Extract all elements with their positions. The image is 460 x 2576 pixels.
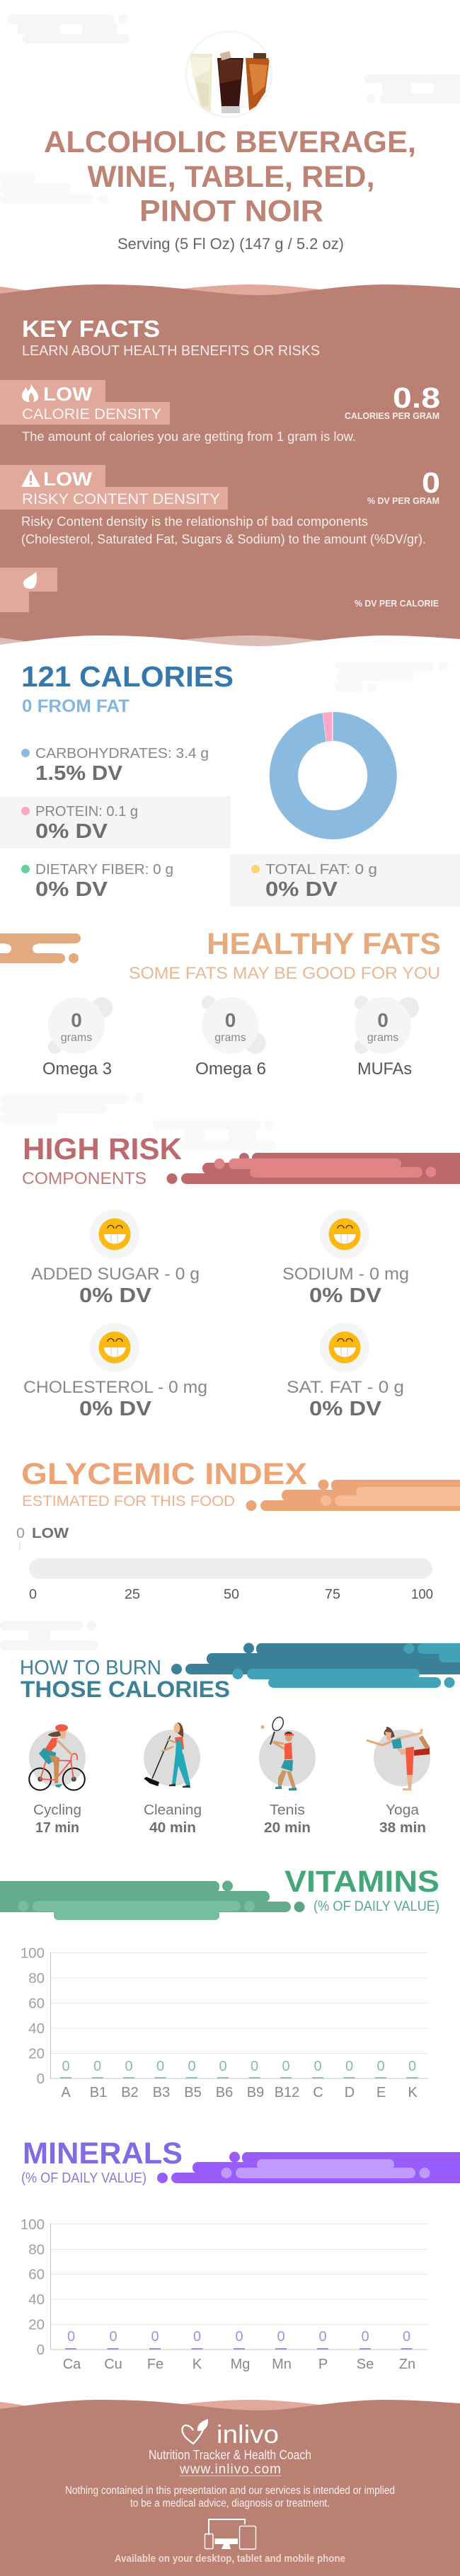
icon: smiley bbox=[328, 1219, 361, 1250]
omega 3: 0 bbox=[71, 1009, 82, 1031]
tagline: Nutrition Tracker & Health Coach bbox=[149, 2447, 311, 2462]
healthy fats heading: HEALTHY FATS bbox=[207, 927, 441, 961]
decorative band: minerals bbox=[157, 2151, 460, 2183]
mufas bbox=[355, 996, 419, 1079]
risky content description bbox=[21, 514, 426, 546]
minerals bar chart bbox=[21, 2216, 428, 2372]
risky content badge bbox=[0, 465, 228, 510]
icon: leaf bbox=[23, 572, 37, 589]
vitamins bar chart: 0 bbox=[125, 2059, 133, 2074]
title: PINOT NOIR bbox=[139, 194, 323, 228]
legend: protein: 0% DV bbox=[35, 820, 108, 843]
minerals bar chart: 100 bbox=[21, 2216, 45, 2233]
activity: tennis: 20 min bbox=[264, 1820, 311, 1836]
panel: how to burn those calories bbox=[20, 1643, 460, 1836]
vitamins bar chart bbox=[21, 1945, 428, 2100]
glycemic scale bar bbox=[19, 1542, 432, 1579]
calorie density description: The amount of calories you are getting from 1 gram is low. bbox=[22, 430, 356, 444]
saturated fat: SAT. FAT - 0 g bbox=[287, 1378, 404, 1397]
risky content description: Risky Content density is the relationship of bad components bbox=[21, 514, 368, 529]
minerals bar chart: 0 bbox=[361, 2329, 369, 2345]
legend: carbohydrates bbox=[21, 745, 209, 785]
vitamins heading: VITAMINS bbox=[284, 1865, 439, 1899]
title: WINE, TABLE, RED, bbox=[88, 160, 375, 194]
minerals bar chart: 80 bbox=[28, 2242, 45, 2258]
vitamins bar chart: 100 bbox=[21, 1945, 45, 1962]
decorative band: glycemic bbox=[246, 1479, 460, 1511]
title: ALCOHOLIC BEVERAGE, bbox=[44, 125, 416, 159]
burn heading light: HOW TO BURN bbox=[20, 1657, 161, 1679]
icon: yoga pose bbox=[367, 1727, 430, 1790]
legend: dietary fiber: DIETARY FIBER: 0 g bbox=[35, 861, 173, 878]
minerals bar chart: 0 bbox=[67, 2329, 75, 2345]
vitamins bar chart: B3 bbox=[153, 2085, 170, 2100]
decorative band: high risk bbox=[167, 1153, 460, 1184]
activity: yoga: Yoga bbox=[386, 1802, 420, 1818]
minerals bar chart: Se bbox=[357, 2357, 374, 2372]
mufas: MUFAs bbox=[357, 1059, 412, 1079]
calories heading: 121 CALORIES bbox=[21, 660, 234, 693]
sodium: SODIUM - 0 mg bbox=[282, 1265, 409, 1284]
vitamins bar chart: B2 bbox=[121, 2085, 139, 2100]
vitamins bar chart: B5 bbox=[184, 2085, 202, 2100]
calorie density value: 0.8 bbox=[393, 381, 440, 414]
vitamins bar chart: 0 bbox=[282, 2059, 290, 2074]
vitamins bar chart: 0 bbox=[188, 2059, 196, 2074]
glycemic heading: GLYCEMIC INDEX bbox=[21, 1457, 307, 1491]
glycemic subheading: ESTIMATED FOR THIS FOOD bbox=[22, 1493, 235, 1510]
vitamins bar chart: B6 bbox=[216, 2085, 233, 2100]
panel: vitamins bbox=[0, 1865, 439, 2100]
minerals bar chart: Zn bbox=[399, 2357, 415, 2372]
vitamins bar chart: 0 bbox=[251, 2059, 258, 2074]
vitamins bar chart: 0 bbox=[37, 2071, 45, 2087]
glycemic scale labels: 0 bbox=[29, 1587, 37, 1602]
icon: smiley bbox=[99, 1332, 130, 1363]
calorie density unit: CALORIES PER GRAM bbox=[345, 410, 439, 421]
icon: smiley bbox=[328, 1332, 361, 1363]
nutrient density unit: % DV PER CALORIE bbox=[355, 598, 439, 609]
minerals bar chart: 60 bbox=[28, 2266, 45, 2283]
omega 6: grams bbox=[214, 1032, 246, 1044]
panel: footer bbox=[0, 2400, 460, 2576]
risky content level: LOW bbox=[43, 468, 93, 490]
risky content value: 0 bbox=[422, 466, 440, 499]
icon: flame bbox=[22, 384, 38, 402]
high risk subheading: COMPONENTS bbox=[22, 1169, 146, 1188]
hero image: drinks in a circle bbox=[185, 30, 273, 118]
omega 3: grams bbox=[61, 1032, 92, 1044]
calorie density level: LOW bbox=[43, 384, 93, 405]
logo: inlivo bbox=[182, 2419, 279, 2449]
decorative band: healthy fats bbox=[0, 933, 81, 963]
legend: total fat: TOTAL FAT: 0 g bbox=[265, 861, 377, 878]
glycemic scale labels: 50 bbox=[224, 1587, 239, 1602]
decorative band: burn bbox=[171, 1643, 460, 1688]
calorie density label: CALORIE DENSITY bbox=[22, 406, 161, 422]
calories from fat: 0 FROM FAT bbox=[22, 696, 130, 716]
minerals bar chart: K bbox=[192, 2357, 202, 2372]
healthy fats subheading: SOME FATS MAY BE GOOD FOR YOU bbox=[129, 964, 440, 983]
calorie density badge bbox=[0, 380, 170, 425]
high risk heading: HIGH RISK bbox=[23, 1132, 182, 1166]
saturated fat: 0% DV bbox=[309, 1398, 382, 1420]
icon: cyclist bbox=[29, 1724, 85, 1790]
risky content description: (Cholesterol, Saturated Fat, Sugars & Sodium) to the amount (%DV/gr). bbox=[21, 532, 426, 546]
vitamins bar chart: 0 bbox=[408, 2059, 416, 2074]
logo: inlivo: inlivo bbox=[217, 2420, 279, 2449]
sodium: 0% DV bbox=[309, 1284, 382, 1307]
vitamins bar chart: 0 bbox=[376, 2059, 385, 2074]
glycemic scale labels: 75 bbox=[325, 1587, 340, 1602]
legend: carbohydrates: CARBOHYDRATES: 3.4 g bbox=[35, 745, 209, 761]
glycemic scale labels bbox=[29, 1587, 433, 1602]
availability note: Available on your desktop, tablet and mobile phone bbox=[115, 2553, 345, 2565]
vitamins bar chart: B12 bbox=[275, 2085, 299, 2100]
minerals bar chart: 40 bbox=[28, 2292, 45, 2308]
activity: cleaning: 40 min bbox=[149, 1820, 196, 1836]
cholesterol: 0% DV bbox=[79, 1398, 152, 1420]
activity: yoga: 38 min bbox=[379, 1820, 426, 1836]
minerals heading: MINERALS bbox=[23, 2137, 183, 2170]
minerals bar chart: 0 bbox=[277, 2329, 285, 2345]
risky content unit: % DV PER GRAM bbox=[367, 495, 439, 506]
saturated fat bbox=[287, 1323, 404, 1420]
minerals subheading: (% OF DAILY VALUE) bbox=[21, 2170, 146, 2186]
vitamins bar chart: C bbox=[313, 2085, 323, 2100]
disclaimer: to be a medical advice, diagnosis or treatment. bbox=[130, 2497, 330, 2509]
minerals bar chart: 0 bbox=[109, 2329, 117, 2345]
added sugar: ADDED SUGAR - 0 g bbox=[31, 1265, 200, 1284]
activity: cycling: 17 min bbox=[35, 1820, 79, 1836]
legend: protein bbox=[0, 796, 231, 849]
activity: cleaning: Cleaning bbox=[144, 1802, 202, 1818]
activity: tennis: Tenis bbox=[270, 1802, 305, 1818]
activity: yoga bbox=[367, 1727, 430, 1836]
vitamins bar chart: 0 bbox=[314, 2059, 322, 2074]
activity: cleaning bbox=[144, 1723, 202, 1836]
vitamins bar chart: 80 bbox=[28, 1970, 45, 1986]
icon: smiley bbox=[99, 1219, 130, 1250]
disclaimer: Nothing contained in this presentation and our services is intended or implied bbox=[65, 2485, 395, 2497]
vitamins bar chart: 0 bbox=[156, 2059, 164, 2074]
activity: cycling bbox=[29, 1724, 86, 1836]
panel: calories bbox=[0, 660, 460, 907]
glycemic scale labels: 25 bbox=[125, 1587, 140, 1602]
risky content label: RISKY CONTENT DENSITY bbox=[22, 491, 220, 507]
panel: glycemic index bbox=[16, 1457, 460, 1602]
vitamins bar chart: B9 bbox=[247, 2085, 264, 2100]
vitamins bar chart: 60 bbox=[28, 1996, 45, 2011]
cholesterol: CHOLESTEROL - 0 mg bbox=[23, 1378, 207, 1397]
glycemic scale labels: 100 bbox=[411, 1587, 433, 1602]
vitamins bar chart: 0 bbox=[219, 2059, 227, 2074]
vitamins bar chart: E bbox=[376, 2085, 386, 2100]
vitamins bar chart: A bbox=[61, 2085, 71, 2100]
legend: dietary fiber: 0% DV bbox=[35, 878, 108, 901]
burn heading bold: THOSE CALORIES bbox=[21, 1677, 230, 1702]
vitamins bar chart: K bbox=[408, 2085, 418, 2100]
omega 6: Omega 6 bbox=[195, 1059, 266, 1079]
mufas: grams bbox=[367, 1032, 398, 1044]
legend: total fat: 0% DV bbox=[265, 878, 338, 901]
activity: tennis bbox=[259, 1715, 316, 1836]
icon: warning triangle bbox=[21, 469, 40, 487]
vitamins bar chart: 0 bbox=[93, 2059, 101, 2074]
minerals bar chart: 0 bbox=[151, 2329, 159, 2345]
cholesterol bbox=[23, 1323, 207, 1420]
website link: www.inlivo.com bbox=[179, 2462, 281, 2477]
vitamins bar chart: 20 bbox=[28, 2045, 45, 2062]
donut chart bbox=[270, 712, 397, 839]
key facts subheading: LEARN ABOUT HEALTH BENEFITS OR RISKS bbox=[22, 343, 320, 359]
panel: healthy fats bbox=[0, 927, 441, 1079]
legend: dietary fiber bbox=[21, 861, 173, 901]
legend: total fat bbox=[230, 854, 460, 907]
minerals bar chart: Ca bbox=[63, 2357, 81, 2372]
legend: protein: PROTEIN: 0.1 g bbox=[35, 803, 138, 820]
disclaimer bbox=[65, 2485, 395, 2509]
serving size: Serving (5 Fl Oz) (147 g / 5.2 oz) bbox=[117, 235, 344, 253]
panel: key facts bbox=[0, 284, 460, 662]
vitamins bar chart: D bbox=[345, 2085, 355, 2100]
vitamins bar chart: 40 bbox=[28, 2020, 45, 2037]
nutrient badge with leaf bbox=[0, 568, 57, 612]
minerals bar chart: 0 bbox=[37, 2342, 45, 2358]
added sugar bbox=[31, 1209, 200, 1307]
icon: tennis player bbox=[260, 1715, 297, 1790]
minerals bar chart: 0 bbox=[235, 2329, 243, 2345]
decorative band: vitamins bbox=[0, 1881, 304, 1920]
panel: high risk components bbox=[22, 1132, 460, 1420]
vitamins bar chart: 0 bbox=[345, 2059, 353, 2074]
icon: person sweeping bbox=[144, 1723, 190, 1788]
glycemic level: LOW bbox=[32, 1526, 69, 1541]
icon: devices bbox=[205, 2519, 256, 2549]
omega 3 bbox=[42, 997, 113, 1079]
glycemic marker value: 0 bbox=[16, 1526, 25, 1541]
omega 6 bbox=[195, 996, 266, 1079]
minerals bar chart: Cu bbox=[104, 2357, 122, 2372]
vitamins bar chart: 0 bbox=[62, 2059, 70, 2074]
activity: cycling: Cycling bbox=[33, 1802, 81, 1818]
vitamins bar chart: B1 bbox=[90, 2085, 107, 2100]
minerals bar chart: Fe bbox=[147, 2357, 163, 2372]
minerals bar chart: Mn bbox=[272, 2357, 292, 2372]
minerals bar chart: Mg bbox=[231, 2357, 250, 2372]
minerals bar chart: 0 bbox=[193, 2329, 201, 2345]
key facts heading: KEY FACTS bbox=[22, 316, 160, 342]
panel: minerals bbox=[21, 2137, 460, 2372]
omega 6: 0 bbox=[225, 1009, 236, 1031]
added sugar: 0% DV bbox=[79, 1284, 152, 1307]
omega 3: Omega 3 bbox=[42, 1059, 112, 1079]
mufas: 0 bbox=[377, 1009, 389, 1031]
legend: carbohydrates: 1.5% DV bbox=[35, 762, 123, 785]
vitamins subheading: (% OF DAILY VALUE) bbox=[314, 1899, 439, 1914]
minerals bar chart: P bbox=[318, 2357, 328, 2372]
minerals bar chart: 0 bbox=[403, 2329, 410, 2345]
minerals bar chart: 20 bbox=[28, 2317, 45, 2333]
sodium bbox=[282, 1209, 409, 1307]
title bbox=[44, 125, 416, 228]
minerals bar chart: 0 bbox=[318, 2329, 327, 2345]
